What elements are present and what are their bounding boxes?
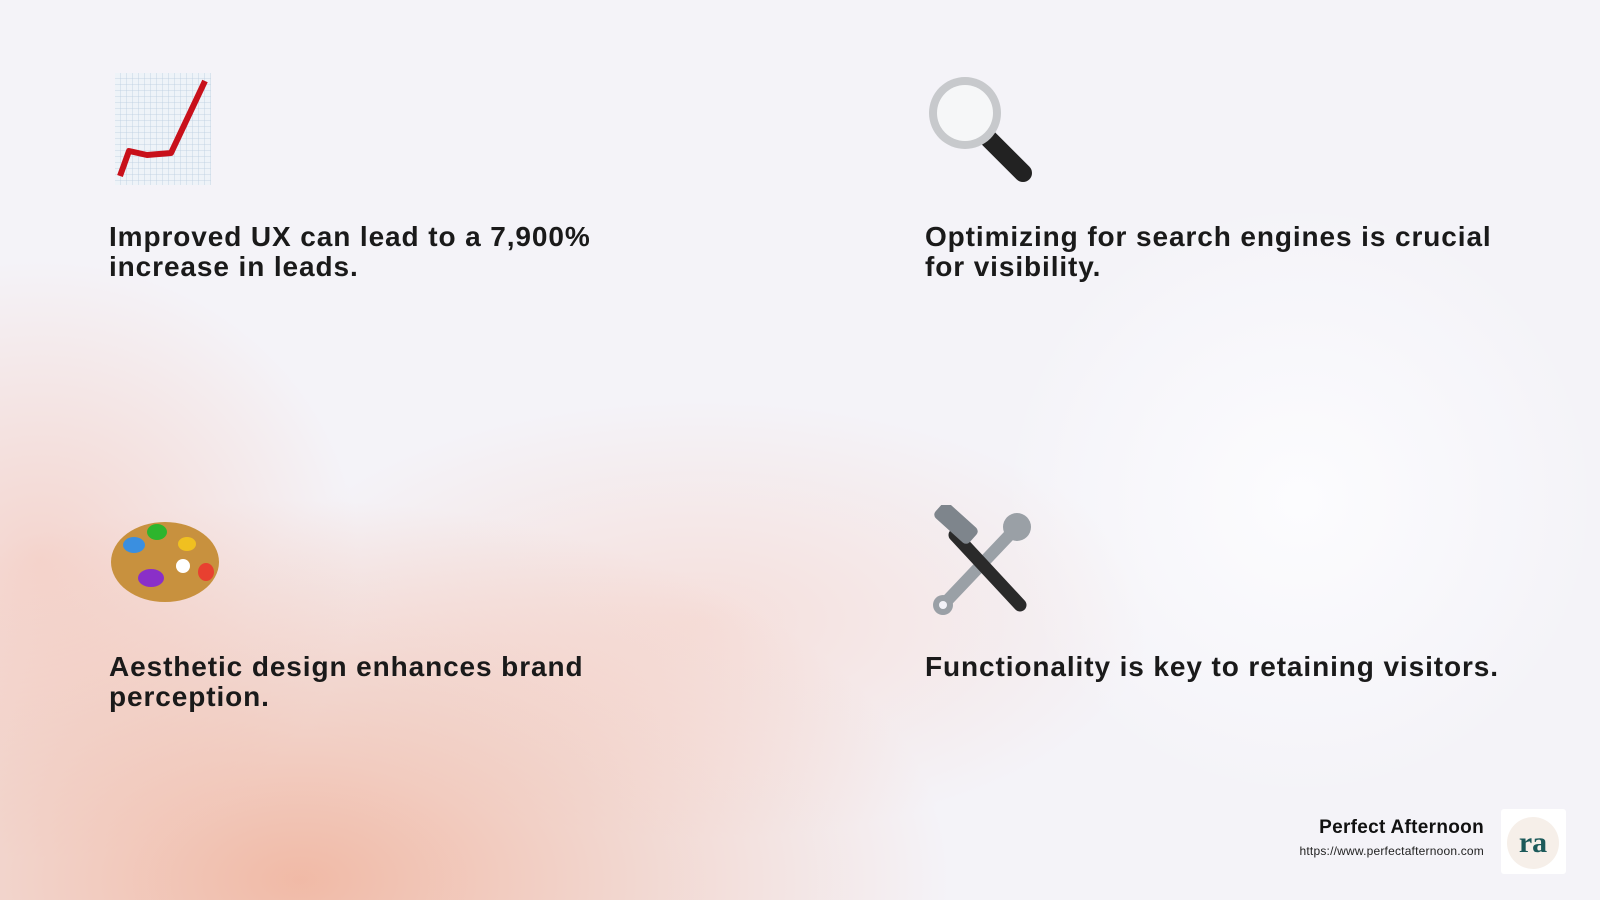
brand [1300, 817, 1484, 858]
text: SEO: Optimizing for search engines is crucial [925, 221, 1492, 252]
text: UX leads [109, 221, 591, 282]
logo [1501, 809, 1566, 874]
icon: tools [933, 505, 1031, 615]
text: UX leads: Improved UX can lead to a 7,900% [109, 221, 591, 252]
brand: https://www.perfectafternoon.com [1300, 844, 1484, 858]
text: SEO: for visibility. [925, 251, 1101, 282]
icon: magnifier [929, 77, 1032, 182]
text: aesthetic: perception. [109, 681, 270, 712]
logo: ra [1519, 826, 1547, 859]
text: SEO [925, 221, 1492, 282]
text: functionality: Functionality is key to retaining visitors. [925, 651, 1499, 682]
text: aesthetic: Aesthetic design enhances brand [109, 651, 583, 682]
icon: chart [115, 73, 211, 185]
icon: palette [111, 522, 219, 602]
brand: Perfect Afternoon [1319, 817, 1484, 838]
text: aesthetic [109, 651, 583, 712]
text: UX leads: increase in leads. [109, 251, 359, 282]
